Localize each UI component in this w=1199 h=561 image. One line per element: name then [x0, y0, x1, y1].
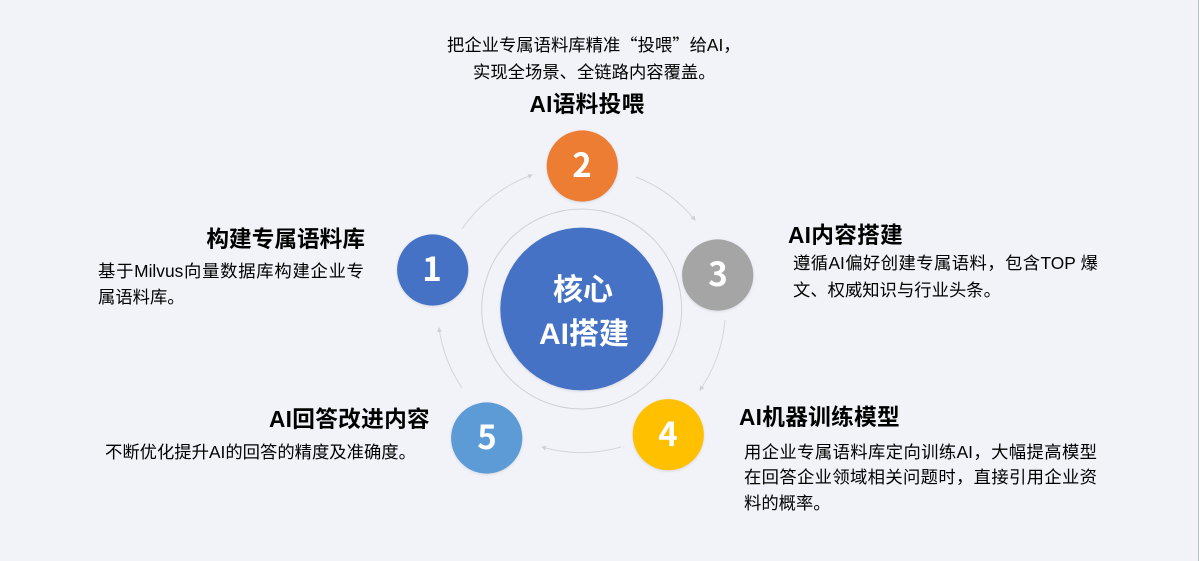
arrow: 2 to 3	[636, 177, 695, 220]
core ring	[482, 209, 682, 409]
heading: step 2: AI语料投喂	[529, 91, 645, 117]
text: step 1 description: 基于Milvus向量数据库构建企业专	[98, 260, 364, 280]
node 1	[397, 234, 468, 306]
text: step 2 description: 把企业专属语料库精准“投喂”给AI，	[447, 31, 741, 56]
node 5: 5	[477, 411, 497, 459]
text: step 1 description: 属语料库。	[98, 287, 185, 307]
heading: step 4: AI机器训练模型	[739, 404, 900, 430]
node 1: 1	[422, 243, 442, 291]
text: step 4 description: 料的概率。	[744, 492, 831, 512]
arrow: 4 to 5	[542, 447, 621, 453]
arrow: 3 to 4	[700, 320, 725, 390]
heading: step 1: 构建专属语料库	[206, 226, 365, 252]
text: step 3 description	[793, 252, 1098, 300]
core circle: 核心	[553, 274, 613, 307]
text: step 5 description: 不断优化提升AI的回答的精度及准确度。	[105, 442, 416, 462]
text: step 4 description	[744, 442, 1097, 512]
text: step 3 description: 文、权威知识与行业头条。	[793, 280, 1001, 300]
arrow: 1 to 2	[462, 175, 532, 229]
node 2	[547, 130, 618, 202]
text: step 4 description: 用企业专属语料库定向训练AI，大幅提高模型	[744, 442, 1097, 462]
text: step 4 description: 在回答企业领域相关问题时，直接引用企业资	[744, 467, 1097, 487]
core circle	[500, 228, 663, 390]
core circle: AI搭建	[539, 318, 629, 351]
node 3	[682, 239, 753, 311]
text: step 1 description	[98, 260, 364, 307]
node 4: 4	[658, 408, 678, 456]
arrow: 5 to 1	[439, 328, 462, 388]
text: step 2 description	[447, 31, 741, 82]
node 5	[451, 402, 522, 474]
node 4	[633, 399, 704, 470]
text: step 3 description: 遵循AI偏好创建专属语料，包含TOP 爆	[793, 252, 1098, 272]
heading: step 3: AI内容搭建	[788, 222, 903, 248]
heading: step 5: AI回答改进内容	[269, 406, 430, 432]
right edge line	[1198, 0, 1199, 561]
node 3: 3	[708, 248, 728, 296]
node 2: 2	[572, 139, 592, 187]
text: step 2 description: 实现全场景、全链路内容覆盖。	[473, 62, 716, 82]
